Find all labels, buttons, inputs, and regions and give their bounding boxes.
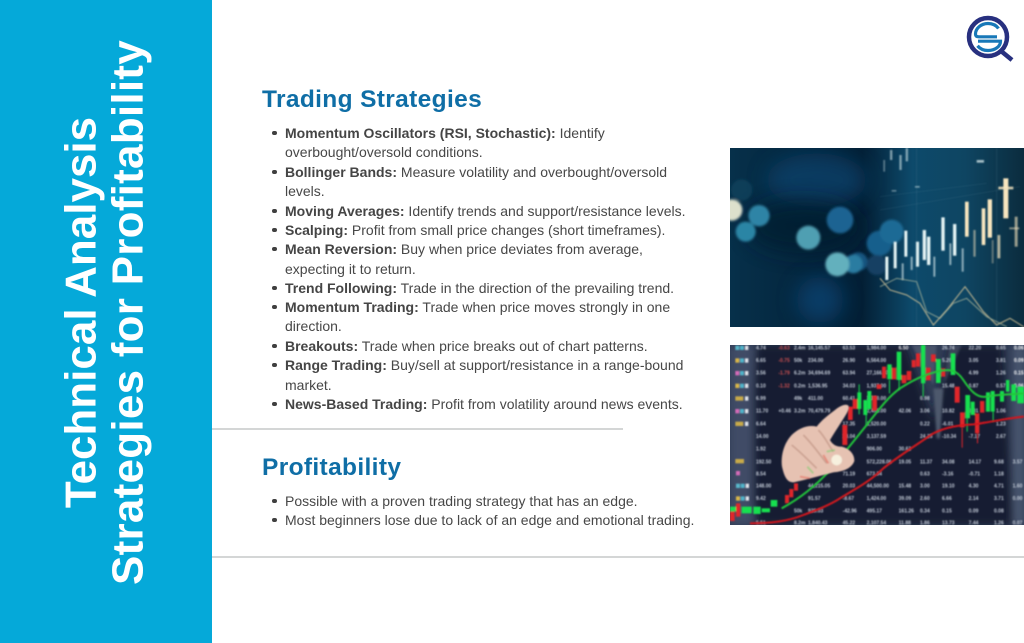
ticker table: 0.06	[1014, 345, 1024, 351]
strategy: range trading	[272, 357, 683, 393]
ticker table: 411.00	[808, 396, 823, 402]
ticker table: 49k	[794, 396, 803, 402]
ticker table: -6.01	[942, 421, 954, 427]
ticker table: +0.46	[778, 409, 791, 415]
ticker table: 0.2m	[794, 383, 806, 389]
sidebar panel	[0, 0, 212, 643]
logo	[966, 16, 1014, 62]
ticker table: 1.92	[756, 447, 766, 453]
sidebar panel: Technical Analysis	[56, 117, 105, 508]
ticker table: -8.67	[843, 496, 854, 502]
image: bokeh candlestick chart	[730, 148, 1024, 424]
ticker table: 192.50	[756, 459, 772, 465]
ticker table: 0.09	[969, 509, 979, 515]
candles	[730, 345, 1024, 521]
ticker table: 572,228.06	[867, 459, 892, 465]
text: overbought/oversold conditions.	[285, 144, 483, 160]
ticker table: 0.15	[942, 509, 952, 515]
ticker table: 2.4m	[794, 345, 806, 351]
ticker table: 0.22	[920, 421, 930, 427]
ticker table: 5.20	[942, 358, 952, 364]
ticker table: 42.06	[899, 409, 911, 415]
ticker table: 39.09	[899, 496, 911, 502]
text: Trend Following: Trade in the direction of the prevailing trend.	[285, 280, 674, 296]
ticker table: 1,520.00	[867, 421, 886, 427]
text: Scalping: Profit from small price changes (short timeframes).	[285, 222, 665, 238]
ticker table: 3.01	[969, 409, 979, 415]
ticker table: 148.00	[756, 483, 772, 489]
sidebar panel: Strategies for Profitability	[103, 40, 152, 585]
text: levels.	[285, 183, 325, 199]
ticker table: 1.06	[996, 409, 1006, 415]
ticker table: 0.15	[1014, 371, 1024, 377]
ticker table: 6.66	[942, 496, 952, 502]
ticker table: 6,564.00	[867, 358, 886, 364]
ticker table: 1.23	[996, 421, 1006, 427]
text: Possible with a proven trading strategy that has an edge.	[285, 493, 638, 509]
ticker table: 4.99	[969, 371, 979, 377]
ticker table: 26.74	[942, 345, 955, 351]
ticker table: 18.04	[843, 434, 855, 440]
ticker table: 1,424.00	[867, 496, 886, 502]
ticker table: 1.18	[994, 471, 1004, 477]
ticker table: 15.48	[899, 483, 911, 489]
ticker table: 19.05	[899, 459, 911, 465]
ticker table: 3.56	[756, 371, 766, 377]
ticker table: 6.2m	[794, 371, 806, 377]
text: Bollinger Bands: Measure volatility and overbought/oversold	[285, 164, 667, 180]
ticker table: 0.34	[920, 509, 930, 515]
sidebar title	[56, 40, 152, 585]
ticker table: 3.00	[920, 483, 930, 489]
ticker table: 63.94	[843, 371, 855, 377]
ticker table: 1,937.00	[867, 383, 886, 389]
ticker table: 34.08	[942, 459, 955, 465]
text: Momentum Trading: Trade when price moves strongly in one	[285, 299, 670, 315]
trend lines	[750, 370, 1024, 523]
ticker table: 34,694.69	[808, 371, 830, 377]
ticker table: 3.05	[969, 358, 979, 364]
text: Range Trading: Buy/sell at support/resistance in a range-bound	[285, 357, 683, 373]
suit	[730, 345, 1024, 525]
text: expecting it to return.	[285, 261, 416, 277]
ticker table: 2.14	[969, 496, 979, 502]
ticker table: 8.54	[756, 471, 766, 477]
ticker table: 3.06	[920, 409, 930, 415]
strategy: momentum oscillators	[272, 125, 605, 160]
text: market.	[285, 377, 332, 393]
ticker table: 44,215.05	[808, 483, 830, 489]
ticker table: 6.65	[756, 358, 766, 364]
ticker table: 16,145.57	[808, 345, 830, 351]
ticker table: 1.60	[1013, 483, 1023, 489]
ticker table: -3.16	[942, 471, 954, 477]
ticker table: 10.82	[942, 409, 955, 415]
ticker table: 4.71	[994, 483, 1004, 489]
ticker table: 2,455.00	[867, 409, 886, 415]
ticker table: 24.25	[920, 434, 933, 440]
ticker table: -0.75	[778, 358, 790, 364]
ticker table: 0.00	[1013, 496, 1023, 502]
ticker table: 19.10	[942, 483, 955, 489]
hand	[782, 405, 854, 482]
ticker table: -10.34	[942, 434, 956, 440]
ticker table: 11.70	[756, 409, 768, 415]
ticker table: 3.81	[996, 358, 1006, 364]
text: Breakouts: Trade when price breaks out of chart patterns.	[285, 338, 648, 354]
ticker table: -0.63	[778, 345, 790, 351]
ticker table: 0.10	[756, 383, 766, 389]
ticker table: 6.99	[756, 396, 766, 402]
ticker table: 3.71	[994, 496, 1004, 502]
ticker table: 91.57	[808, 496, 821, 502]
ticker table: -1.32	[778, 383, 790, 389]
ticker table: 50k	[794, 358, 803, 364]
ticker table: 71.19	[843, 471, 855, 477]
ticker table: 30.62	[899, 447, 911, 453]
ticker table: 63.53	[843, 345, 855, 351]
ticker table: 673.34	[867, 471, 882, 477]
ticker table: 3.57	[1013, 459, 1023, 465]
ticker table: 20.03	[843, 483, 855, 489]
ticker flags	[735, 346, 749, 501]
ticker table: 11.37	[920, 459, 932, 465]
ticker table: 2.60	[920, 496, 930, 502]
ticker table: 161.26	[899, 509, 914, 515]
text: Moving Averages: Identify trends and support/resistance levels.	[285, 203, 685, 219]
ticker table: 0.65	[996, 345, 1006, 351]
ticker table: -0.71	[969, 471, 980, 477]
heading: Profitability: Profitability	[262, 454, 401, 481]
ticker table: 0.98	[920, 396, 930, 402]
strategy list	[272, 125, 685, 412]
ticker table: 27,166.47	[867, 371, 889, 377]
ticker table: 906.00	[867, 447, 882, 453]
ticker table: -42.96	[843, 509, 857, 515]
image: trader pointing at stock chart	[730, 345, 1024, 525]
ticker table: 9.42	[756, 496, 766, 502]
ticker table: 6.64	[756, 421, 766, 427]
ticker table: 26.90	[843, 358, 855, 364]
ticker table: 0.87	[969, 383, 979, 389]
ticker table: 1,536.95	[808, 383, 828, 389]
ticker table: 0.63	[920, 471, 930, 477]
ticker table: 1.26	[996, 371, 1006, 377]
ticker table	[756, 345, 1024, 526]
strategy: bollinger bands	[272, 164, 667, 199]
ticker table: 3.2m	[794, 409, 806, 415]
ticker table: 3,300.00	[867, 396, 886, 402]
ticker table: -1.79	[778, 371, 790, 377]
ticker table: 2.67	[996, 434, 1006, 440]
text: direction.	[285, 318, 342, 334]
ticker table: 0.09	[1014, 358, 1024, 364]
ticker table: 1,984.00	[867, 345, 886, 351]
ticker table: 60.41	[843, 396, 855, 402]
ticker table: 50k	[794, 509, 803, 515]
ticker table: 22.20	[969, 345, 981, 351]
text: Most beginners lose due to lack of an edge and emotional trading.	[285, 512, 694, 528]
ticker table: 935.03	[808, 509, 824, 515]
strategy: mean reversion	[272, 241, 643, 277]
ticker table: 14.17	[969, 459, 981, 465]
ticker table: 0.06	[1014, 383, 1024, 389]
text: Mean Reversion: Buy when price deviates from average,	[285, 241, 643, 257]
ticker table: 495.17	[867, 509, 882, 515]
ticker table: 14.00	[756, 434, 769, 440]
ticker table: 4.74	[756, 345, 766, 351]
ticker table: 70,479.79	[808, 409, 830, 415]
ticker table: 234.00	[808, 358, 824, 364]
ticker table: 0.57	[996, 383, 1006, 389]
strategy: momentum trading	[272, 299, 670, 334]
ticker table: -7.17	[969, 434, 980, 440]
ticker table: 17.35	[843, 421, 855, 427]
ticker table: 6.50	[899, 345, 909, 351]
text: Momentum Oscillators (RSI, Stochastic): Identify	[285, 125, 605, 141]
ticker table: 34.03	[843, 383, 855, 389]
profitability list	[272, 493, 694, 528]
ticker table: 9.68	[994, 459, 1004, 465]
ticker table: 0.08	[994, 509, 1004, 515]
ticker table: 44,500.00	[867, 483, 889, 489]
text: News-Based Trading: Profit from volatility around news events.	[285, 396, 683, 412]
ticker table: 15.48	[942, 383, 955, 389]
ticker table: 4.30	[969, 483, 979, 489]
ticker table: 3,137.59	[867, 434, 886, 440]
heading: Trading Strategies: Trading Strategies	[262, 86, 482, 113]
